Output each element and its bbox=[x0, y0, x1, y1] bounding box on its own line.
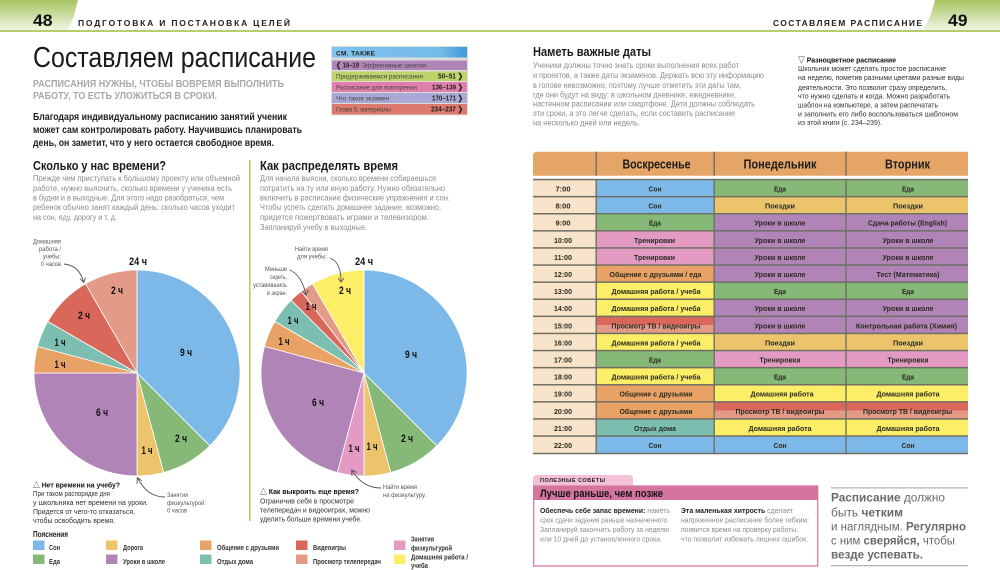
row 18:00 bbox=[533, 368, 968, 385]
row 10:00: 10:00 bbox=[554, 236, 572, 245]
row 10:00: Тренировки bbox=[634, 236, 675, 245]
row 15:00: Просмотр ТВ / видеоигры bbox=[612, 321, 700, 330]
row 15:00 bbox=[533, 316, 968, 333]
pie values left: 1 ч bbox=[54, 359, 66, 371]
legend title: Пояснения bbox=[33, 530, 68, 539]
row 16:00 bbox=[533, 333, 968, 350]
pull quote bbox=[831, 487, 968, 566]
text block: colorful schedule: Школьник может сделать простое расписание bbox=[798, 64, 946, 73]
callout: find time for sport: Найти время bbox=[383, 483, 417, 491]
row 9:00: Уроки в школе bbox=[754, 219, 806, 228]
legend: homework: Домашняя работа / bbox=[411, 552, 469, 562]
pie values left bbox=[54, 285, 192, 457]
row 14:00: Домашняя работа / учеба bbox=[612, 304, 701, 313]
pull quote: с ним сверяйся, чтобы bbox=[831, 536, 955, 548]
pull quote: быть четким bbox=[831, 508, 903, 520]
tips right column bbox=[681, 506, 809, 544]
callout: homework 0 hours: учебы: bbox=[43, 252, 61, 260]
subtitle bbox=[33, 78, 284, 102]
pie values left: 1 ч bbox=[142, 445, 152, 457]
callout text: how to find time: △ Как выкроить еще время? bbox=[260, 487, 359, 496]
text block: how much time: в будни и в выходные. Для этого надо разобраться, чем bbox=[33, 194, 224, 202]
callout text: no time: △ Нет времени на учебу? bbox=[33, 480, 120, 490]
row 20:00: 20:00 bbox=[554, 407, 572, 416]
see also row 2: 50–51 ❯ bbox=[438, 72, 463, 82]
intro text bbox=[33, 112, 302, 149]
row 11:00: Уроки в школе bbox=[882, 253, 934, 262]
row 21:00: Домашняя работа bbox=[876, 424, 940, 433]
row 11:00: Уроки в школе bbox=[754, 253, 806, 262]
legend: school: Уроки в школе bbox=[123, 557, 165, 566]
see also row 1 bbox=[332, 60, 467, 70]
row 8:00 bbox=[533, 197, 968, 214]
legend: games bbox=[296, 540, 346, 552]
table header: Воскресенье bbox=[622, 158, 691, 172]
text block: colorful schedule: из этой книги (с. 234–239). bbox=[798, 118, 882, 127]
callout: less screen time bbox=[253, 266, 308, 297]
row 21:00: Домашняя работа bbox=[748, 424, 812, 433]
pie values right bbox=[278, 285, 417, 455]
title: Составляем расписание bbox=[33, 42, 316, 74]
callout: find time for study: для учебы: bbox=[297, 252, 327, 260]
row 11:00: Тренировки bbox=[634, 253, 675, 262]
row 10:00 bbox=[533, 231, 968, 248]
row 20:00: Общение с друзьями bbox=[620, 407, 693, 416]
row 16:00: 16:00 bbox=[554, 338, 572, 347]
callout: homework 0 hours: Домашняя bbox=[33, 238, 61, 246]
section title right: СОСТАВЛЯЕМ РАСПИСАНИЕ bbox=[773, 18, 922, 28]
row 11:00: 11:00 bbox=[554, 253, 572, 262]
text block: how to allocate: придется пожертвовать играми и телевизором. bbox=[260, 213, 429, 222]
pie chart left bbox=[33, 238, 240, 514]
legend: homework: учеба bbox=[411, 561, 429, 570]
page number 48: 48 bbox=[33, 11, 52, 30]
text block: colorful schedule: на неделю, пометив разными цветами разные виды bbox=[798, 73, 964, 82]
intro text: день, он заметит, что у него остается свободное время. bbox=[33, 137, 274, 149]
text block: key dates: эти сроки, а это легче сделать, если составить расписание bbox=[533, 109, 735, 118]
legend bbox=[33, 530, 469, 570]
row 16:00: Домашняя работа / учеба bbox=[612, 338, 701, 347]
row 21:00: 21:00 bbox=[554, 424, 572, 433]
row 14:00: Уроки в школе bbox=[754, 304, 806, 313]
legend: sport: Занятия bbox=[411, 534, 434, 544]
callout: find time for study bbox=[295, 245, 344, 282]
tips right column: напряженное расписание более гибким: bbox=[681, 516, 809, 524]
row 13:00: Еда bbox=[902, 287, 915, 296]
callout: less screen time: Меньше bbox=[265, 266, 287, 273]
row 20:00: Просмотр ТВ / видеоигры bbox=[863, 407, 952, 416]
row 13:00: 13:00 bbox=[554, 287, 572, 296]
subtitle: РАБОТУ, ТО ЕСТЬ УЛОЖИТЬСЯ В СРОКИ. bbox=[33, 90, 217, 102]
row 17:00: Тренировки bbox=[760, 356, 801, 364]
legend: food: Еда bbox=[49, 557, 61, 566]
see also row 1: ❮ 18–19 bbox=[336, 60, 359, 70]
pie values right: 9 ч bbox=[405, 349, 417, 361]
row 12:00: 12:00 bbox=[554, 270, 572, 279]
tips left column: Запланируй закончить работу за неделю bbox=[540, 525, 669, 534]
legend: tv: Просмотр телепередач bbox=[313, 557, 381, 566]
callout text: how to find time: телепередач и видеоиграх, можно bbox=[260, 506, 370, 514]
text block: how much time: работе, нужно выяснить, сколько времени у ученика есть bbox=[33, 184, 232, 193]
tips heading: Лучше раньше, чем позже bbox=[540, 488, 663, 500]
callout: homework 0 hours bbox=[33, 238, 86, 282]
callout: homework 0 hours: работа / bbox=[39, 245, 61, 253]
text block: how to allocate bbox=[260, 174, 450, 232]
callout: find time for study: Найти время bbox=[295, 245, 328, 253]
intro text: Благодаря индивидуальному расписанию занятий ученик bbox=[33, 112, 288, 123]
heading: how much time: Сколько у нас времени? bbox=[33, 158, 166, 173]
tips right column: появится время на проверку работы, bbox=[681, 525, 798, 534]
row 8:00: Поездки bbox=[893, 202, 923, 211]
row 7:00: Еда bbox=[902, 184, 915, 194]
pie total left: 24 ч bbox=[129, 256, 147, 268]
callout: homework 0 hours: 0 часов bbox=[41, 261, 61, 268]
text block: key dates: в голове невозможно, поэтому лучше отметить эти даты там, bbox=[533, 81, 741, 90]
legend: friends: Общение с друзьями bbox=[217, 543, 279, 552]
tips right column: Эта маленькая хитрость сделает bbox=[681, 506, 794, 515]
legend: friends bbox=[200, 540, 279, 552]
callout text: no time: При таком распорядке дня bbox=[33, 489, 110, 498]
text block: how to allocate: Для начала выясни, сколько времени собираешься bbox=[260, 174, 436, 183]
row 7:00 bbox=[533, 180, 968, 197]
row 8:00: Поездки bbox=[765, 202, 795, 211]
pie values right: 1 ч bbox=[278, 336, 290, 348]
tips left column bbox=[540, 506, 670, 544]
row 18:00: 18:00 bbox=[554, 373, 572, 382]
pie chart right bbox=[253, 245, 467, 499]
callout: find time for sport bbox=[352, 470, 426, 499]
row 10:00: Уроки в школе bbox=[754, 236, 806, 245]
row 19:00 bbox=[533, 385, 968, 402]
column divider bbox=[249, 160, 251, 521]
row 22:00: Сон bbox=[774, 441, 786, 450]
pie values right: 1 ч bbox=[306, 301, 316, 313]
legend: rest bbox=[200, 554, 254, 566]
see also row 3 bbox=[332, 82, 467, 92]
callout text: no time bbox=[33, 480, 148, 525]
see also row 4: Что такое экзамен bbox=[336, 96, 389, 102]
pie total right: 24 ч bbox=[355, 256, 373, 268]
row 19:00: 19:00 bbox=[554, 390, 572, 399]
see also row 3: 136–139 ❯ bbox=[432, 82, 463, 92]
schedule table bbox=[533, 152, 968, 454]
text block: how to allocate: Запланируй учебу в выходные. bbox=[260, 223, 367, 232]
intro text: может сам контролировать работу. Научившись планировать bbox=[33, 124, 302, 136]
row 12:00: Уроки в школе bbox=[754, 270, 806, 279]
row 11:00 bbox=[533, 248, 968, 265]
panel: how to allocate bbox=[260, 158, 450, 232]
panel: see also: СМ. ТАКЖЕ bbox=[336, 50, 376, 58]
row 22:00 bbox=[533, 436, 968, 453]
row 15:00: Уроки в школе bbox=[754, 321, 806, 330]
see also row 3: Расписание для повторения bbox=[336, 84, 417, 92]
row 10:00: Уроки в школе bbox=[882, 236, 934, 245]
row 20:00 bbox=[533, 402, 968, 419]
tips tab: ПОЛЕЗНЫЕ СОВЕТЫ bbox=[540, 478, 606, 484]
row 21:00: Отдых дома bbox=[634, 424, 677, 433]
row 18:00: Домашняя работа / учеба bbox=[612, 373, 701, 382]
callout text: no time: у школьника нет времени на уроки. bbox=[33, 498, 148, 507]
row 8:00: Сон bbox=[648, 202, 662, 211]
row 14:00: 14:00 bbox=[554, 304, 572, 313]
text block: how much time bbox=[33, 174, 240, 222]
row 13:00: Домашняя работа / учеба bbox=[612, 287, 701, 296]
legend: homework bbox=[394, 552, 469, 570]
row 22:00: Сон bbox=[902, 441, 914, 450]
legend: games: Видеоигры bbox=[313, 543, 346, 552]
pie values right: 1 ч bbox=[288, 315, 298, 327]
text block: key dates bbox=[533, 61, 764, 128]
pie values right: 6 ч bbox=[312, 397, 324, 409]
text block: how to allocate: включить в расписание физические упражнения и сон. bbox=[260, 194, 450, 202]
row 13:00 bbox=[533, 282, 968, 299]
heading: how to allocate: Как распределять время bbox=[260, 158, 398, 173]
panel: see also bbox=[331, 46, 468, 116]
row 9:00: Сдача работы (English) bbox=[868, 219, 947, 228]
page header right bbox=[773, 0, 1000, 30]
row 18:00: Еда bbox=[774, 373, 787, 382]
row 7:00: 7:00 bbox=[556, 184, 570, 194]
legend: sport: физкультурой bbox=[411, 544, 452, 552]
callout text: how to find time: Ограничив себя в просмотре bbox=[260, 496, 354, 506]
text block: colorful schedule: и заполнить его либо воспользоваться шаблоном bbox=[798, 110, 958, 118]
row 22:00: Сон bbox=[648, 441, 662, 450]
pie values right: 1 ч bbox=[366, 441, 378, 453]
tips right column: что позволит избежать лишних ошибок. bbox=[681, 534, 808, 544]
pull quote: везде успевать. bbox=[831, 550, 923, 562]
pie values left: 2 ч bbox=[111, 285, 123, 297]
pie values left: 2 ч bbox=[78, 310, 90, 322]
row 19:00: Домашняя работа bbox=[750, 390, 814, 399]
text block: key dates: где они будут на виду: в школьном дневнике, ежедневнике, bbox=[533, 90, 736, 100]
callout text: how to find time bbox=[260, 487, 370, 524]
callout: sport 0 hours: 0 часов bbox=[167, 508, 187, 514]
text block: key dates: настенном расписании или смартфоне. Дети должны соблюдать bbox=[533, 100, 755, 108]
row 12:00: Тест (Математика) bbox=[876, 270, 940, 279]
legend: food bbox=[33, 554, 61, 566]
row 7:00: Еда bbox=[774, 184, 787, 194]
text block: how to allocate: Чтобы успеть сделать домашнее задание, возможно, bbox=[260, 203, 441, 212]
callout: sport 0 hours: физкультурой: bbox=[167, 499, 206, 507]
callout: find time for sport: на физкультуру. bbox=[383, 492, 426, 499]
row 13:00: Еда bbox=[774, 287, 787, 296]
row 21:00 bbox=[533, 419, 968, 436]
text block: colorful schedule: что нужно сделать и когда. Можно разработать bbox=[798, 92, 950, 100]
callout: less screen time: в экран. bbox=[267, 290, 287, 297]
see also row 4: 170–171 ❯ bbox=[432, 94, 463, 104]
callout: sport 0 hours bbox=[137, 478, 206, 514]
pull quote: и наглядным. Регулярно bbox=[831, 522, 966, 534]
see also row 2 bbox=[332, 72, 467, 82]
pull quote: Расписание должно bbox=[831, 493, 945, 505]
tips left column: срок сдачи задания раньше назначенного. bbox=[540, 516, 669, 524]
text block: key dates: на несколько дней или недель. bbox=[533, 118, 640, 128]
text block: how much time: ребенок обычно занят каждый день: сколько часов уходит bbox=[33, 203, 235, 212]
row 15:00: Контрольная работа (Химия) bbox=[856, 321, 957, 330]
see also row 5 bbox=[332, 104, 467, 114]
text block: colorful schedule: деятельности. Это позволит сразу определить, bbox=[798, 83, 947, 92]
table header bbox=[533, 152, 968, 176]
table header: Вторник bbox=[885, 158, 931, 172]
row 9:00 bbox=[533, 214, 968, 231]
callout: less screen time: уставившись bbox=[253, 282, 288, 289]
pie values left: 2 ч bbox=[175, 433, 187, 445]
text block: key dates: Ученики должны точно знать сроки выполнения всех работ bbox=[533, 61, 739, 70]
see also row 5: 234–237 ❯ bbox=[431, 104, 463, 114]
row 15:00: 15:00 bbox=[554, 321, 572, 330]
row 18:00: Еда bbox=[902, 373, 915, 382]
row 19:00: Домашняя работа bbox=[876, 390, 940, 399]
text block: how much time: Прежде чем приступать к большому проекту или объемной bbox=[33, 174, 240, 183]
legend: commute bbox=[106, 540, 144, 552]
row 9:00: Еда bbox=[649, 219, 662, 228]
row 14:00: Уроки в школе bbox=[882, 304, 934, 313]
tips tab bbox=[533, 475, 633, 486]
callout: sport 0 hours: Занятия bbox=[167, 492, 188, 499]
tips left column: или 10 дней до установленного срока. bbox=[540, 534, 662, 544]
legend: commute: Дорога bbox=[123, 543, 144, 552]
legend: sleep bbox=[33, 540, 60, 552]
pie values left: 9 ч bbox=[180, 347, 192, 359]
pie values right: 1 ч bbox=[348, 443, 360, 455]
see also row 1: Эффективные занятия bbox=[362, 62, 426, 70]
row 14:00 bbox=[533, 299, 968, 316]
panel: how much time bbox=[33, 158, 240, 222]
see also row 5: Глава 5, материалы bbox=[336, 106, 391, 114]
row 16:00: Поездки bbox=[765, 338, 795, 347]
pie values left: 1 ч bbox=[54, 337, 66, 349]
text block: how to allocate: потратить на ту или иную работу. Нужно обязательно bbox=[260, 184, 446, 193]
row 17:00: Еда bbox=[649, 356, 662, 364]
text block: key dates: и проектов, а также даты экзаменов. Держать всю эту информацию bbox=[533, 71, 764, 80]
row 12:00 bbox=[533, 265, 968, 282]
text block: how much time: на сон, еду, дорогу и т. д. bbox=[33, 213, 117, 222]
row 7:00: Сон bbox=[648, 184, 662, 194]
pie values right: 2 ч bbox=[339, 285, 351, 297]
legend: school bbox=[106, 554, 165, 566]
legend: rest: Отдых дома bbox=[217, 557, 254, 566]
text block: colorful schedule: ▽ Разноцветное расписание bbox=[798, 56, 896, 64]
row 9:00: 9:00 bbox=[556, 219, 570, 228]
row 8:00: 8:00 bbox=[556, 202, 570, 211]
page number 49: 49 bbox=[948, 11, 968, 30]
row 12:00: Общение с друзьями / еда bbox=[610, 270, 702, 279]
callout: less screen time: сидеть, bbox=[270, 274, 287, 281]
callout text: no time: чтобы освободить время. bbox=[33, 516, 115, 525]
callout text: no time: Придется от чего-то отказаться, bbox=[33, 507, 135, 516]
see also row 4 bbox=[332, 93, 467, 104]
pie values right: 2 ч bbox=[401, 433, 413, 445]
row 19:00: Общение с друзьями bbox=[620, 390, 693, 399]
tips left column: Обеспечь себе запас времени: наметь bbox=[540, 506, 670, 515]
text block: colorful schedule bbox=[798, 56, 964, 127]
table header: Понедельник bbox=[744, 158, 817, 172]
row 17:00 bbox=[533, 350, 968, 368]
page header left bbox=[0, 0, 1000, 32]
pie values left: 6 ч bbox=[96, 407, 108, 419]
row 17:00: Тренировки bbox=[888, 356, 929, 364]
heading: key dates: Наметь важные даты bbox=[533, 44, 651, 59]
legend: sport bbox=[394, 534, 452, 552]
section title left: ПОДГОТОВКА И ПОСТАНОВКА ЦЕЛЕЙ bbox=[78, 17, 290, 28]
row 20:00: Просмотр ТВ / видеоигры bbox=[736, 407, 824, 416]
row 22:00: 22:00 bbox=[554, 441, 572, 450]
text block: colorful schedule: шаблон на компьютере, а затем распечатать bbox=[798, 100, 938, 110]
row 17:00: 17:00 bbox=[554, 356, 572, 364]
panel: key dates bbox=[533, 44, 764, 128]
panel: useful tips bbox=[533, 475, 818, 566]
subtitle: РАСПИСАНИЯ НУЖНЫ, ЧТОБЫ ВОВРЕМЯ ВЫПОЛНИТЬ bbox=[33, 78, 284, 90]
callout text: how to find time: уделить больше времени учебе. bbox=[260, 514, 362, 524]
see also row 2: Придерживаемся расписания bbox=[336, 74, 423, 80]
legend: sleep: Сон bbox=[49, 543, 60, 552]
legend: tv bbox=[296, 554, 381, 566]
row 16:00: Поездки bbox=[893, 338, 923, 347]
